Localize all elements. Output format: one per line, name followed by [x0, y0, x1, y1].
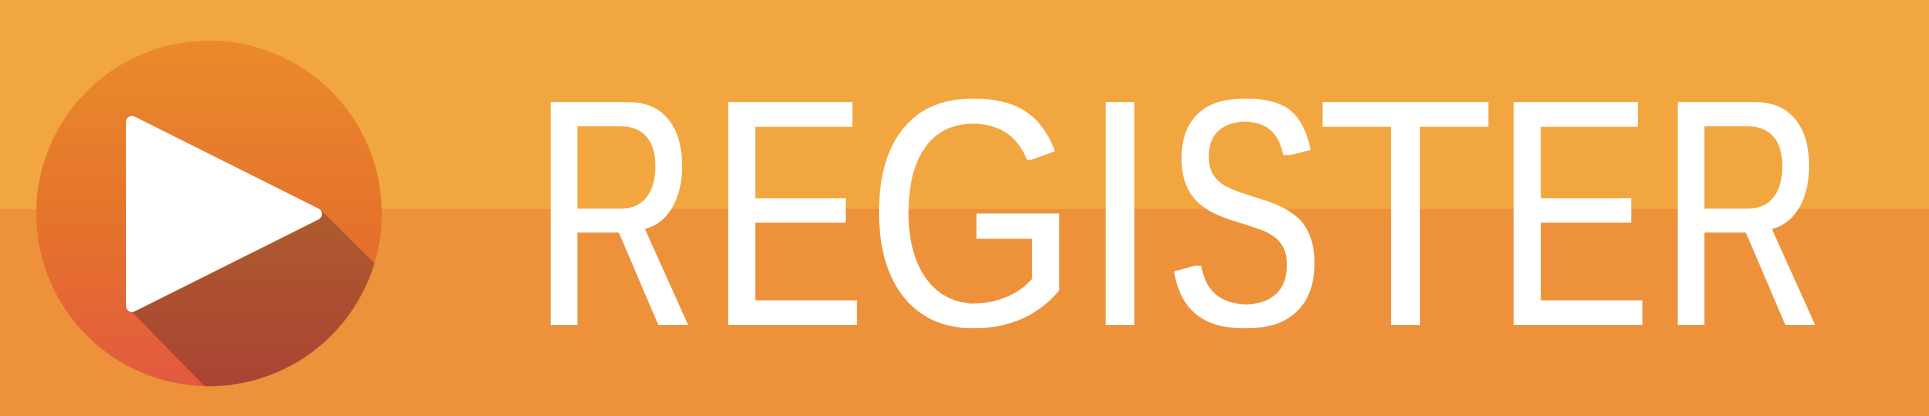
heading: REGISTER: E: [1498, 33, 1649, 395]
heading: REGISTER: S: [1166, 31, 1322, 394]
heading: REGISTER: G: [867, 33, 1077, 395]
heading: REGISTER: [536, 31, 1822, 395]
icon: play button: [36, 40, 382, 386]
icon: white play triangle: [132, 122, 316, 306]
heading: REGISTER: R: [1663, 32, 1822, 394]
banner background: upper band: [0, 0, 1929, 209]
banner background: lower band: [0, 209, 1929, 416]
heading: REGISTER: T: [1317, 33, 1494, 395]
icon: long diagonal shadow: [132, 209, 374, 386]
heading: REGISTER: E: [713, 33, 864, 395]
heading: REGISTER: I: [1078, 32, 1163, 394]
heading: REGISTER: R: [536, 32, 695, 394]
icon: orange gradient disc: [36, 41, 382, 386]
